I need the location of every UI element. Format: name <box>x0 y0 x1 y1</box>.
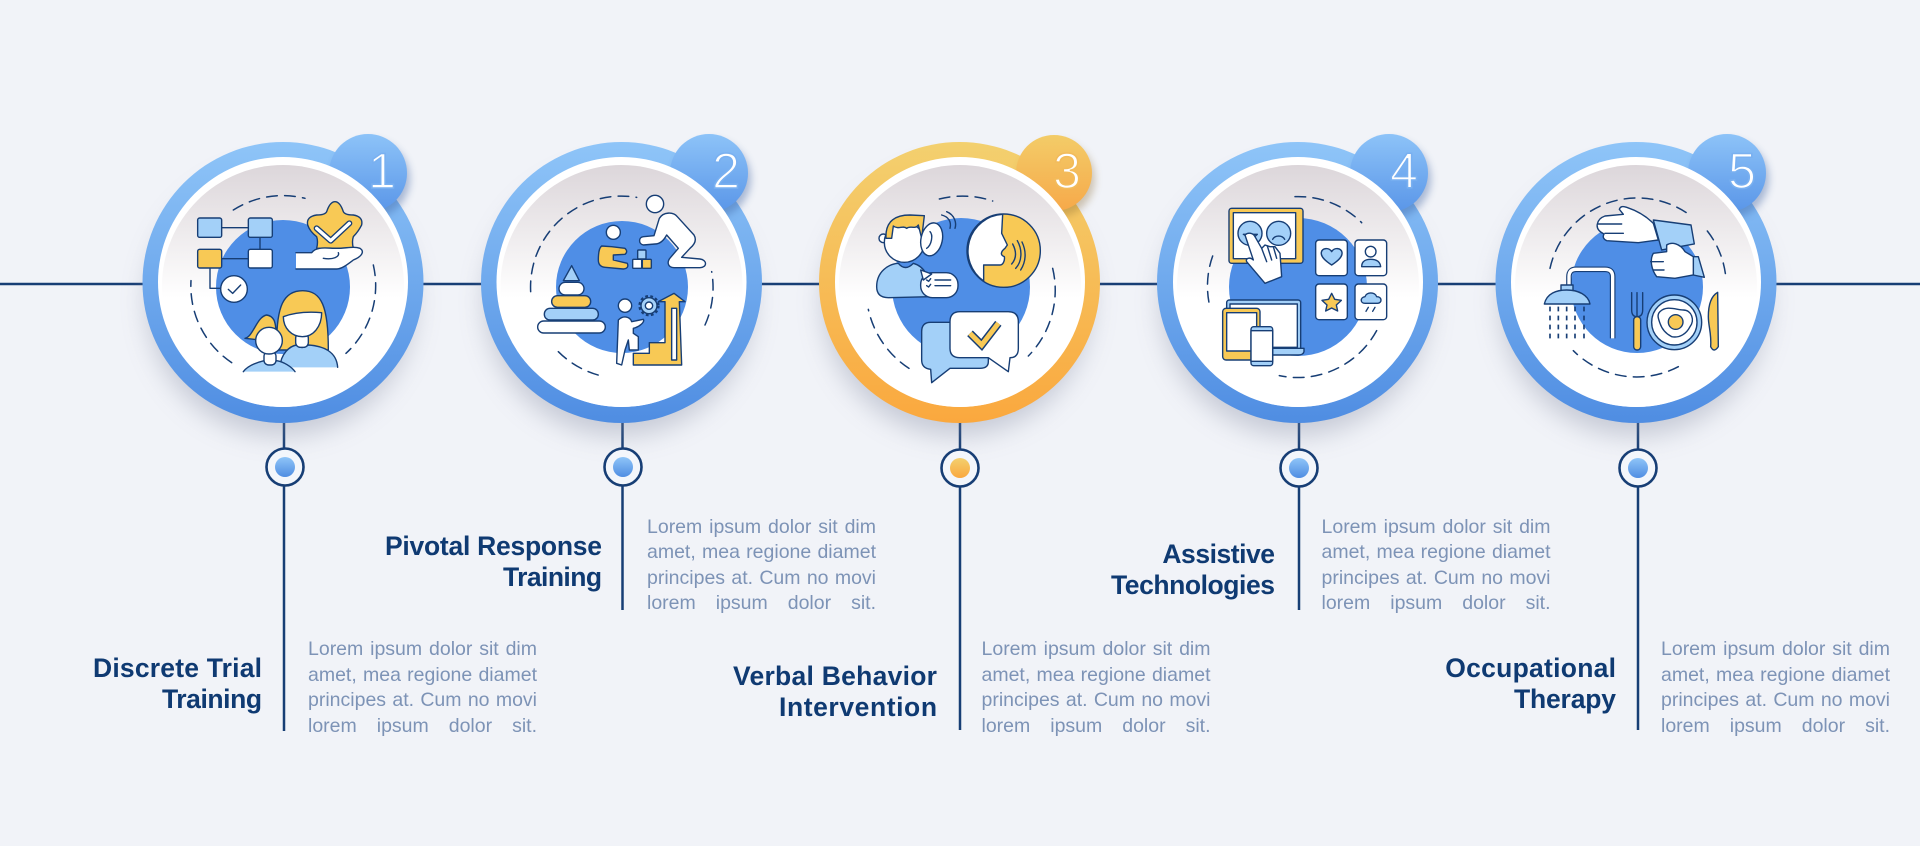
step 4 connector line <box>1298 420 1300 610</box>
step 2 node <box>604 448 642 486</box>
step 3 description: principes at. Cum no movi <box>982 689 1210 711</box>
step 1 description: amet, mea regione diamet <box>308 664 537 686</box>
step 3 heading <box>733 661 937 722</box>
step 1 description: Lorem ipsum dolor sit dim <box>308 638 537 660</box>
step 4 heading: Technologies <box>1111 570 1275 600</box>
step 3 description <box>982 637 1210 741</box>
step 5 heading: Therapy <box>1514 684 1616 714</box>
step 3 number: 3 <box>1053 143 1081 199</box>
step 4 heading: Assistive <box>1162 539 1275 569</box>
step 4 description: principes at. Cum no movi <box>1322 566 1550 588</box>
step 3 panel <box>733 135 1210 741</box>
step 4 description <box>1322 514 1550 618</box>
step 3 connector line <box>959 420 961 730</box>
step 3 description: amet, mea regione diamet <box>982 664 1210 686</box>
step 5 circle <box>1496 134 1776 436</box>
step 3 description: Lorem ipsum dolor sit dim <box>982 638 1210 660</box>
step 5 panel <box>1445 134 1890 741</box>
step 5 connector line <box>1637 420 1639 730</box>
step 1 connector line <box>283 420 285 731</box>
step 5 description: principes at. Cum no movi <box>1661 689 1890 711</box>
step 4 heading <box>1111 539 1275 600</box>
step 2 heading: Training <box>503 562 602 592</box>
step 3 icon: listening child, speaking profile, speech bubbles <box>868 196 1055 383</box>
step 2 description <box>647 514 876 618</box>
step 4 description: amet, mea regione diamet <box>1322 541 1550 563</box>
step 1 heading: Training <box>162 684 262 714</box>
step 1 description: principes at. Cum no movi <box>308 689 537 711</box>
step 4 number: 4 <box>1390 143 1418 199</box>
step 2 circle <box>481 134 762 436</box>
step 4 node <box>1280 450 1318 486</box>
step 2 connector line <box>621 420 624 610</box>
step 1 icon: flowchart, star in hand, parent and child <box>191 196 376 372</box>
step 1 panel <box>93 134 537 741</box>
step 3 circle <box>819 135 1100 436</box>
step 3 description: lorem ipsum dolor sit. <box>982 714 1210 736</box>
step 1 heading <box>93 653 262 714</box>
step 1 circle <box>142 134 424 436</box>
step 5 icon: helping hands, shower, fork, plate and knife <box>1544 198 1726 377</box>
step 5 description: lorem ipsum dolor sit. <box>1661 714 1890 736</box>
step 5 description: amet, mea regione diamet <box>1661 664 1890 686</box>
step 2 description: amet, mea regione diamet <box>647 541 876 563</box>
step 5 node <box>1620 450 1656 486</box>
step 1 description <box>308 637 537 741</box>
step 2 panel <box>385 134 876 618</box>
step 4 description: Lorem ipsum dolor sit dim <box>1322 516 1550 538</box>
step 5 number: 5 <box>1728 143 1756 199</box>
step 5 heading: Occupational <box>1445 653 1616 683</box>
step 3 heading: Verbal Behavior <box>733 661 937 691</box>
step 1 description: lorem ipsum dolor sit. <box>308 714 537 736</box>
step 4 panel <box>1111 134 1550 618</box>
step 2 icon: adult and child play, ring pyramid, climbing stairs <box>531 195 713 377</box>
step 1 node <box>266 448 304 486</box>
step 4 circle <box>1157 134 1438 436</box>
horizontal timeline line <box>0 283 1920 285</box>
step 2 heading: Pivotal Response <box>385 531 602 561</box>
step 2 number: 2 <box>712 143 740 199</box>
step 5 description: Lorem ipsum dolor sit dim <box>1661 638 1890 660</box>
step 3 node <box>942 450 978 486</box>
step 4 description: lorem ipsum dolor sit. <box>1322 592 1550 614</box>
step 2 description: lorem ipsum dolor sit. <box>647 592 876 614</box>
step 3 heading: Intervention <box>779 692 937 722</box>
step 2 description: principes at. Cum no movi <box>647 566 876 588</box>
step 2 heading <box>385 531 602 592</box>
step 5 description <box>1661 637 1890 741</box>
step 1 heading: Discrete Trial <box>93 653 262 683</box>
step 5 heading <box>1445 653 1616 714</box>
step 1 number: 1 <box>368 143 396 199</box>
step 2 description: Lorem ipsum dolor sit dim <box>647 516 876 538</box>
step 4 icon: touch tablet, app tiles, devices <box>1207 197 1387 378</box>
